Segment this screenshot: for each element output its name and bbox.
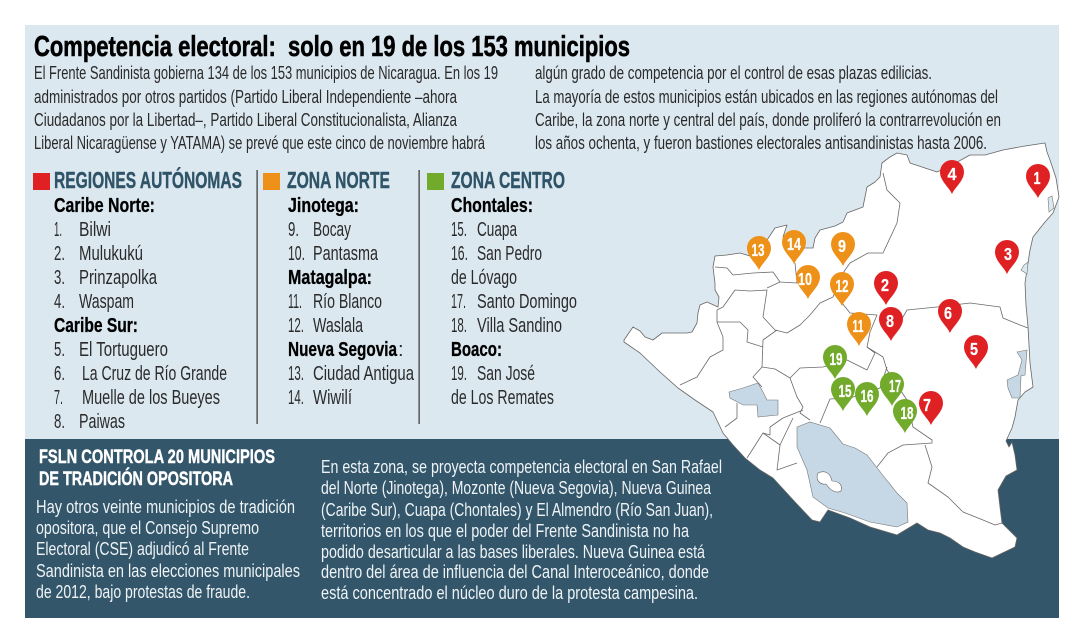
pin 11: 11 [852, 316, 864, 336]
callout text: right: está concentrado el núcleo duro de la protesta campesina. [321, 583, 698, 603]
pin 13: 13 [752, 240, 765, 260]
pin 18 [893, 399, 917, 433]
intro text: left column: El Frente Sandinista gobierna 134 de los 153 municipios de Nicaragua. En los 19 [34, 63, 498, 83]
items: Caribe Sur [54, 339, 227, 433]
items: Caribe Sur: Muelle de los Bueyes [82, 387, 220, 409]
pin 1 [1026, 164, 1050, 198]
subheading: Jinotega: Jinotega: [288, 195, 359, 217]
map: Lake Nicaragua [797, 422, 908, 527]
pin 12: 12 [836, 276, 849, 296]
items: Jinotega: Bocay [313, 219, 351, 241]
map: land outline [624, 143, 1059, 558]
callout heading: FSLN: FSLN CONTROLA 20 MUNICIPIOS [39, 447, 275, 468]
pin 14: 14 [787, 234, 801, 254]
items: Caribe Norte: Bilwi [79, 219, 111, 241]
pin 19 [823, 345, 847, 379]
pin 4: 4 [948, 164, 957, 184]
items: Nueva Segovia: Ciudad Antigua [313, 363, 415, 385]
items: Matagalpa: 12. [288, 315, 304, 337]
callout text: left: Electoral (CSE) adjudicó al Frente [36, 539, 249, 559]
items: Jinotega: Pantasma [313, 243, 379, 265]
pin 6: 6 [944, 303, 952, 323]
items: Caribe Norte: 1. [54, 219, 62, 241]
legend square: green [427, 173, 444, 190]
items: Caribe Sur: El Tortuguero [79, 339, 168, 361]
pin 3: 3 [1004, 244, 1012, 264]
pin 11 [847, 312, 871, 346]
items: Boaco [451, 363, 554, 409]
items: Nueva Segovia [288, 363, 415, 409]
pin 7 [919, 391, 943, 425]
callout text: left: Sandinista en las elecciones municipales [36, 561, 300, 581]
items: Chontales: de Lóvago [451, 267, 517, 289]
items: Jinotega [288, 219, 379, 265]
pin 8: 8 [886, 311, 894, 331]
pin 17 [880, 372, 904, 406]
title: Competencia electoral: solo en 19 de los 153 municipios [34, 31, 630, 63]
pin 10: 10 [798, 269, 812, 289]
callout text: right: territorios en los que el poder del Frente Sandinista no ha [321, 521, 690, 541]
items: Chontales: Santo Domingo [477, 291, 577, 313]
items: Chontales: 15. [451, 219, 467, 241]
pin 16: 16 [860, 386, 874, 406]
items: Matagalpa [288, 291, 382, 337]
items: Jinotega: 9. [288, 219, 299, 241]
items: Caribe Sur: La Cruz de Río Grande [82, 363, 227, 385]
pin 9 [831, 232, 855, 266]
items: Chontales: 17. [451, 291, 466, 313]
subheading: Matagalpa: Matagalpa: [288, 267, 372, 289]
pin 4 [940, 160, 964, 194]
callout text: right [321, 457, 722, 603]
pin 6 [938, 299, 962, 333]
legend square: orange [263, 173, 280, 190]
pin 14 [782, 230, 806, 264]
items: Chontales: Villa Sandino [477, 315, 562, 337]
intro text: right column [535, 63, 1001, 153]
callout text: left: opositora, que el Consejo Supremo [36, 518, 259, 538]
items: Boaco: 19. [451, 363, 467, 385]
items: Caribe Norte: 3. [54, 267, 65, 289]
items: Chontales [451, 219, 577, 337]
pin 3 [995, 240, 1019, 274]
pin 2: 2 [881, 275, 889, 295]
items: Boaco: San José [477, 363, 535, 385]
map: north lagoon [1021, 196, 1054, 274]
map: department borders [680, 173, 1028, 525]
items: Caribe Sur: 7. [54, 387, 63, 409]
map: Lake Managua [729, 383, 778, 417]
items: Caribe Norte: Prinzapolka [79, 267, 158, 289]
subheading: Caribe Sur: Caribe Sur: [54, 315, 138, 337]
panel: dark background [25, 439, 1059, 618]
intro text: right column: algún grado de competencia por el control de esas plazas edilicias. [535, 63, 932, 83]
callout text: left: de 2012, bajo protestas de fraude. [36, 582, 250, 602]
legend square: red [33, 173, 50, 190]
items: Caribe Sur: 5. [54, 339, 65, 361]
map of Nicaragua [624, 143, 1059, 558]
list: Regiones Autónomas [33, 166, 242, 433]
pin 5: 5 [970, 339, 978, 359]
items: Chontales: 16. [451, 243, 468, 265]
items: Boaco: de Los Remates [451, 387, 554, 409]
pin 1: 1 [1034, 168, 1041, 188]
pin 17: 17 [889, 376, 901, 396]
callout heading: FSLN [39, 447, 275, 490]
items: Nueva Segovia: Wiwilí [313, 387, 352, 409]
items: Chontales: 18. [451, 315, 467, 337]
subheading: Nueva Segovia: Nueva Segovia [288, 339, 398, 361]
callout text: right: podido desarticular a las bases liberales. Nueva Guinea está [321, 542, 706, 562]
pin 10 [796, 265, 820, 299]
list: Zona Norte [263, 167, 415, 409]
pin 12 [830, 272, 854, 306]
callout text: left [36, 497, 300, 602]
items: Caribe Norte: Mulukukú [79, 243, 143, 265]
map: eastern lagoons [1007, 350, 1027, 398]
intro text: left column: administrados por otros partidos (Partido Liberal Independiente –ahora [34, 87, 458, 107]
subheading: Caribe Norte: Caribe Norte: [54, 195, 155, 217]
items: Caribe Norte: 4. [54, 291, 65, 313]
heading: Regiones Autónomas: REGIONES AUTÓNOMAS [54, 166, 242, 193]
callout text: right: En esta zona, se proyecta competencia electoral en San Rafael [321, 457, 722, 477]
intro text: left column [34, 63, 498, 153]
list: Zona Centro [427, 167, 577, 409]
pin 18: 18 [900, 403, 914, 423]
pin 19: 19 [830, 349, 843, 369]
map pins [747, 160, 1050, 433]
panel: light background [25, 25, 1059, 439]
callout text: right: dentro del área de influencia del Canal Interoceánico, donde [321, 562, 709, 582]
pin 16 [855, 382, 879, 416]
callout text: left: Hay otros veinte municipios de tradición [36, 497, 295, 517]
items: Chontales: Cuapa [477, 219, 518, 241]
callout text: right: (Caribe Sur), Cuapa (Chontales) y El Almendro (Río San Juan), [321, 500, 713, 520]
pin 5 [964, 335, 988, 369]
intro text: left column: Ciudadanos por la Libertad–, Partido Liberal Constitucionalista, Alianza [34, 110, 458, 130]
items: Caribe Norte: 2. [54, 243, 65, 265]
items: Nueva Segovia: 13. [288, 363, 304, 385]
items: Matagalpa: Río Blanco [313, 291, 382, 313]
callout text: right: del Norte (Jinotega), Mozonte (Nueva Segovia), Nueva Guinea [321, 478, 712, 498]
pin 13 [747, 236, 771, 270]
items: Caribe Sur: 8. [54, 411, 65, 433]
pin 9: 9 [838, 236, 846, 256]
items: Nueva Segovia: 14. [288, 387, 304, 409]
pin 15: 15 [838, 381, 852, 401]
subheading: Chontales: Chontales: [451, 195, 533, 217]
subheading: Boaco: Boaco: [451, 339, 502, 361]
pin 2 [874, 271, 898, 305]
items: Matagalpa: 11. [288, 291, 302, 313]
subheading: Nueva Segovia: : [398, 339, 404, 361]
pin 15 [831, 377, 855, 411]
items: Caribe Sur: Paiwas [79, 411, 125, 433]
heading: Zona Centro: ZONA CENTRO [451, 167, 565, 193]
pin 8 [879, 307, 903, 341]
items: Chontales: San Pedro [477, 243, 542, 265]
pin 7: 7 [923, 395, 931, 415]
map: Ometepe island [817, 472, 841, 492]
items: Caribe Norte: Waspam [79, 291, 134, 313]
items: Caribe Norte [54, 219, 158, 313]
callout heading: FSLN: DE TRADICIÓN OPOSITORA [39, 468, 233, 490]
items: Caribe Sur: 6. [54, 363, 65, 385]
items: Matagalpa: Waslala [313, 315, 364, 337]
heading: Zona Norte: ZONA NORTE [287, 167, 390, 193]
intro text: left column: Liberal Nicaragüense y YATAMA) se prevé que este cinco de noviembre habrá [34, 133, 486, 153]
items: Jinotega: 10. [288, 243, 305, 265]
